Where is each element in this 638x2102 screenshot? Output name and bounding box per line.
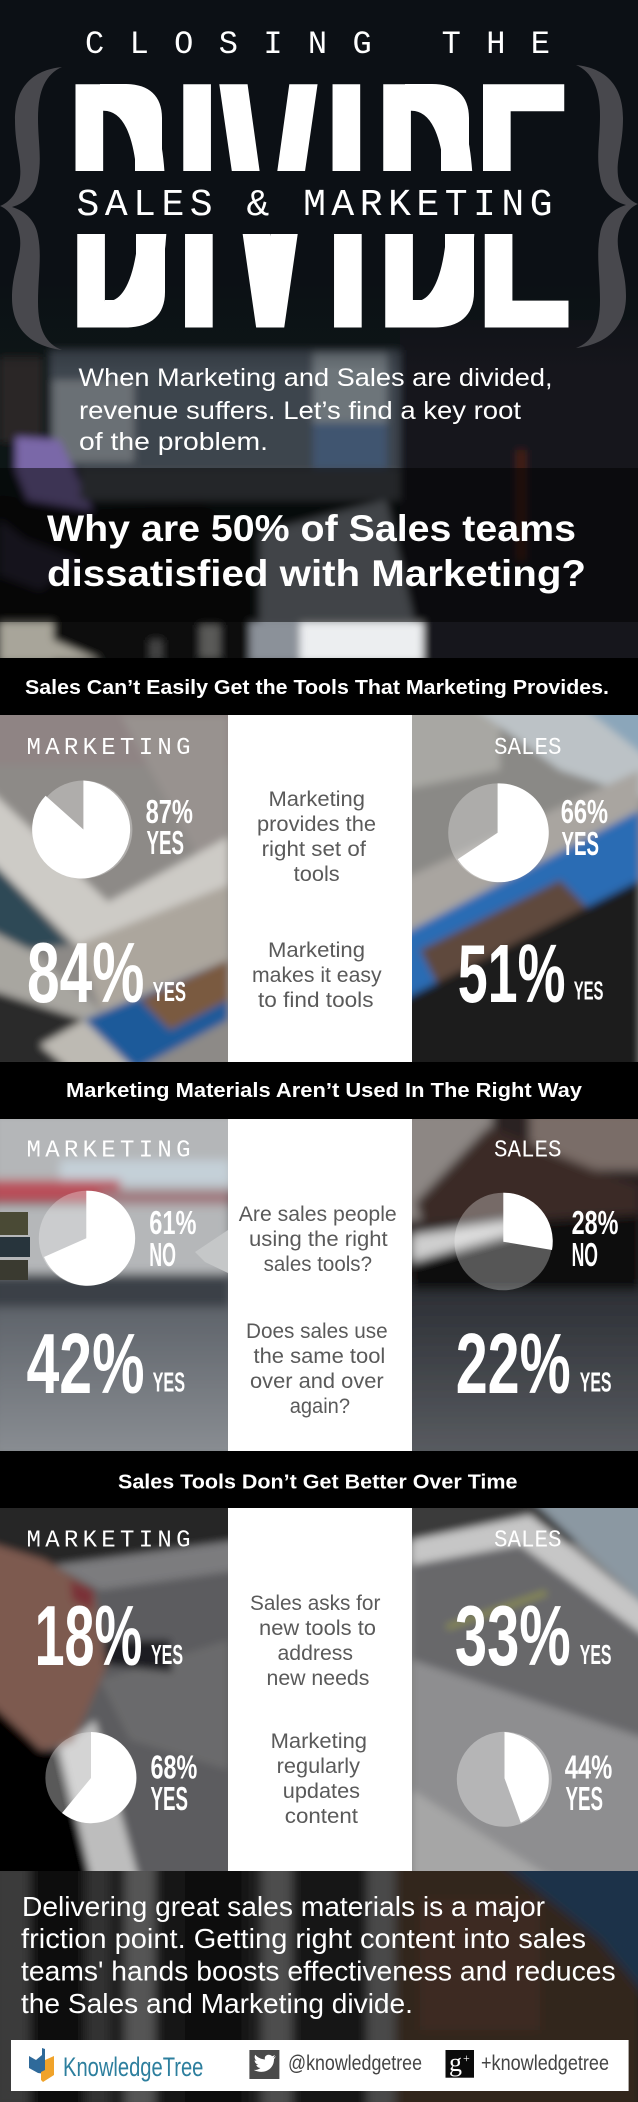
pie chart: marketing 68% yes: 68% — [150, 1748, 197, 1785]
pie chart: marketing 87% yes: YES — [146, 824, 184, 861]
pie chart: sales 28% no: NO — [572, 1236, 598, 1273]
question: new tools for new needs: new tools to — [259, 1617, 376, 1640]
main question: dissatisfied with Marketing? — [47, 553, 586, 594]
title word: divide, upper half — [76, 84, 564, 171]
question: new tools for new needs: new needs — [266, 1667, 369, 1690]
section 1 heading band: Sales Can’t Easily Get the Tools That Marketing Provides. — [25, 677, 609, 699]
stat: marketing 84% yes: YES — [153, 976, 186, 1007]
question: regularly updates content: updates — [283, 1780, 360, 1803]
section 1 sales label: SALES — [494, 735, 562, 762]
pie chart: marketing 61% no: NO — [149, 1236, 176, 1273]
closing statement: the Sales and Marketing divide. — [21, 1988, 413, 2019]
icon: google plus: + — [463, 2051, 470, 2065]
intro paragraph: revenue suffers. Let’s find a key root — [79, 397, 521, 425]
subtitle: sales and marketing: SALES & MARKETING — [76, 184, 552, 227]
question: same tool over and over: again? — [290, 1395, 350, 1418]
left curly brace — [0, 67, 62, 350]
intro paragraph: When Marketing and Sales are divided, — [78, 364, 552, 392]
question: right sales tools — [239, 1203, 397, 1276]
right curly brace — [576, 65, 638, 348]
title word: divide, lower half — [77, 234, 568, 328]
pie chart: marketing 68% yes — [45, 1732, 197, 1823]
main question — [47, 508, 586, 594]
pie chart: sales 28% no: 28% — [572, 1204, 618, 1241]
pie chart: marketing 87% yes: 87% — [146, 793, 193, 830]
question: regularly updates content: regularly — [277, 1755, 361, 1778]
section 2 centre column — [228, 1119, 412, 1451]
section 3 heading band: Sales Tools Don’t Get Better Over Time — [118, 1471, 518, 1493]
section 2 heading band — [0, 1062, 638, 1119]
section 2 marketing label: MARKETING — [26, 1138, 190, 1164]
stat: marketing 42% yes: YES — [153, 1367, 185, 1398]
section 2 right photo — [402, 1110, 638, 1460]
question: regularly updates content — [271, 1730, 367, 1828]
title word: divide, lower half: DIVIDE — [75, 9, 566, 403]
question: right set of tools: tools — [294, 863, 340, 886]
closing statement: Delivering great sales materials is a major — [22, 1891, 545, 1922]
icon: google plus — [446, 2048, 474, 2078]
question: same tool over and over — [246, 1320, 388, 1418]
pie chart: sales 44% yes: 44% — [565, 1748, 612, 1785]
question: new tools for new needs: Sales asks for — [250, 1592, 380, 1615]
question: new tools for new needs: address — [278, 1642, 353, 1665]
stat: marketing 42% yes: 42% — [26, 1317, 144, 1412]
section 1 heading band — [0, 658, 638, 715]
section 3 marketing label: MARKETING — [26, 1528, 190, 1554]
question: right set of tools: right set of — [262, 838, 366, 861]
intro paragraph — [78, 364, 552, 456]
brand name: KnowledgeTree — [63, 2052, 203, 2082]
closing statement: friction point. Getting right content into sales — [21, 1923, 586, 1954]
footer photo background — [0, 1861, 638, 2102]
section 1 right photo — [412, 715, 638, 1062]
pie chart: sales 66% yes — [448, 783, 608, 882]
main question: Why are 50% of Sales teams — [47, 508, 576, 549]
pie chart: sales 44% yes — [457, 1732, 612, 1827]
stat: sales 33% yes: 33% — [455, 1589, 571, 1684]
section 1 marketing label: MARKETING — [26, 735, 190, 762]
question: right set of tools — [257, 788, 376, 886]
stat: marketing 18% yes: 18% — [35, 1589, 142, 1684]
question: same tool over and over: Does sales use — [246, 1320, 388, 1343]
stat: sales 51% yes: YES — [574, 976, 603, 1006]
section 2 heading band: Marketing Materials Aren’t Used In The Right Way — [66, 1080, 583, 1102]
stat: marketing 18% yes: YES — [151, 1639, 183, 1670]
section 1 left photo — [0, 715, 228, 1062]
section 2 left photo — [0, 1110, 240, 1460]
icon: knowledgetree logo — [29, 2048, 54, 2082]
question: right set of tools: provides the — [257, 813, 376, 836]
pie chart: sales 66% yes: YES — [562, 825, 599, 862]
google plus handle: +knowledgetree — [481, 2052, 609, 2075]
question: right sales tools: Are sales people — [239, 1203, 397, 1226]
header photo background — [0, 0, 638, 680]
question: right sales tools: sales tools? — [264, 1253, 372, 1276]
question: easy to find tools: Marketing — [268, 939, 365, 962]
pie chart: marketing 61% no — [39, 1191, 196, 1286]
section 3 centre column — [228, 1508, 412, 1871]
pie chart: sales 28% no — [454, 1193, 618, 1290]
heading: closing the: CLOSING THE — [85, 26, 550, 63]
question: right set of tools: Marketing — [268, 788, 365, 811]
title word: divide, upper half: DIVIDE — [73, 9, 564, 403]
question: same tool over and over: the same tool — [254, 1345, 385, 1368]
question: easy to find tools: makes it easy — [252, 964, 382, 987]
question: same tool over and over: over and over — [250, 1370, 384, 1393]
question: right sales tools: using the right — [249, 1228, 388, 1251]
stat: sales 22% yes: YES — [580, 1367, 612, 1398]
closing statement: teams' hands boosts effectiveness and reduces — [21, 1956, 616, 1987]
stat: marketing 84% yes: 84% — [27, 926, 144, 1021]
section 3 sales label: SALES — [494, 1528, 562, 1554]
pie chart: marketing 61% no: 61% — [149, 1204, 196, 1241]
section 3 heading band — [0, 1451, 638, 1508]
question: regularly updates content: Marketing — [271, 1730, 367, 1753]
section 3 right photo — [402, 1498, 638, 1883]
pie chart: sales 44% yes: YES — [566, 1780, 603, 1817]
stat: sales 33% yes: YES — [580, 1639, 612, 1670]
icon: twitter — [249, 2050, 279, 2079]
question: new tools for new needs — [250, 1592, 380, 1690]
pie chart: marketing 87% yes — [32, 780, 193, 878]
section 2 sales label: SALES — [494, 1138, 562, 1164]
closing statement — [21, 1891, 616, 2019]
question: easy to find tools: to find tools — [258, 989, 374, 1012]
darkening overlay band — [0, 468, 638, 622]
pie chart: marketing 68% yes: YES — [150, 1780, 188, 1817]
section 1 centre column — [228, 715, 412, 1062]
footer white bar — [11, 2040, 629, 2091]
stat: sales 51% yes: 51% — [458, 927, 566, 1020]
question: easy to find tools — [252, 939, 382, 1012]
intro paragraph: of the problem. — [79, 428, 268, 456]
icon: google plus: g — [449, 2048, 462, 2077]
section 3 left photo — [0, 1508, 228, 1871]
question: regularly updates content: content — [285, 1805, 358, 1828]
stat: sales 22% yes: 22% — [456, 1317, 571, 1412]
twitter handle: @knowledgetree — [288, 2052, 422, 2075]
pie chart: sales 66% yes: 66% — [561, 793, 608, 830]
